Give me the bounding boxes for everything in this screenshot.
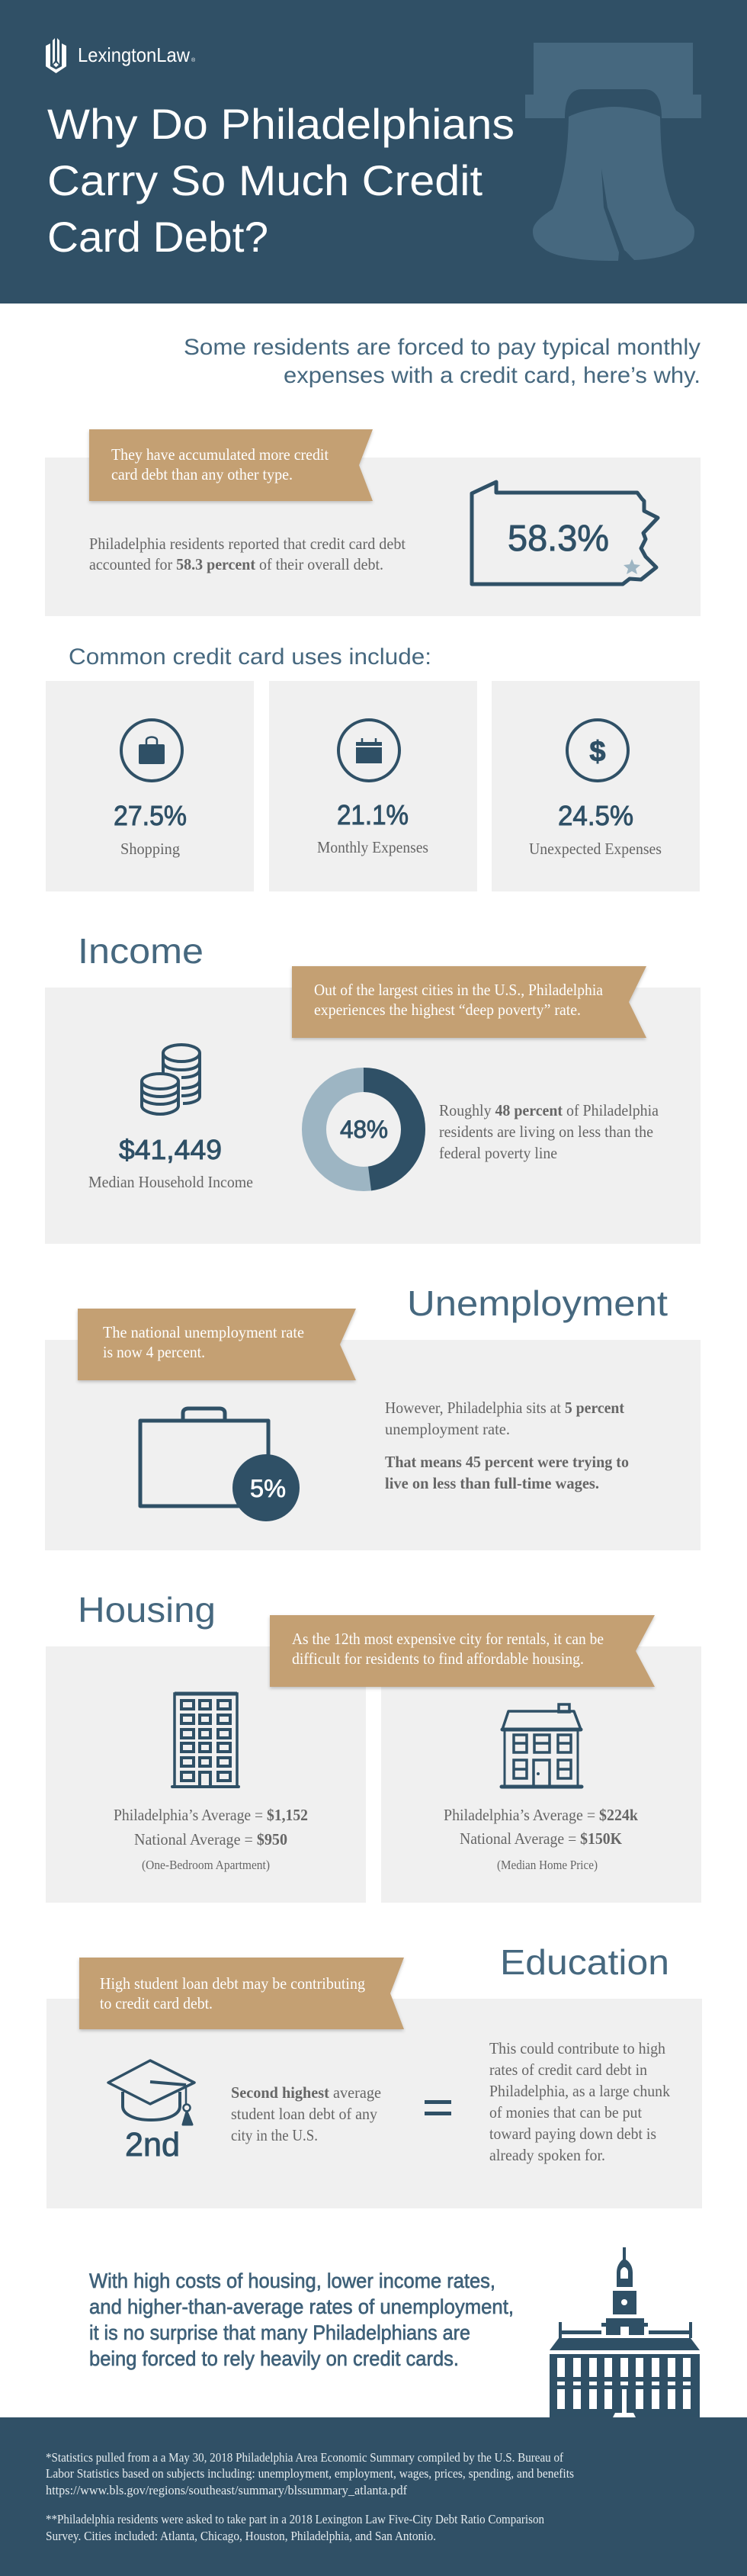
icon: graduation cap bbox=[108, 2060, 194, 2125]
title: Why Do Philadelphians bbox=[47, 100, 515, 148]
footnote: statistics source: Labor Statistics based on subjects including: unemployment, employment, wages, prices, spending, and benefits bbox=[46, 2466, 574, 2481]
ribbon callout: housing bbox=[270, 1615, 655, 1687]
title bbox=[47, 100, 515, 261]
icon: briefcase with 5%: 5% bbox=[250, 1475, 286, 1502]
stats: rent: (One-Bedroom Apartment) bbox=[142, 1858, 270, 1872]
body text: consequence: already spoken for. bbox=[489, 2146, 605, 2164]
ribbon callout: housing: difficult for residents to find affordable housing. bbox=[292, 1649, 584, 1668]
icon: coin stacks bbox=[142, 1045, 200, 1114]
card: unexpected expenses: 24.5% bbox=[558, 800, 633, 831]
stats: home price: National Average = $150K bbox=[460, 1829, 623, 1848]
body text: federal poverty line bbox=[439, 1144, 557, 1162]
ribbon callout: housing: As the 12th most expensive city for rentals, it can be bbox=[292, 1630, 604, 1648]
card: shopping: Shopping bbox=[120, 840, 180, 858]
body text: second highest: city in the U.S. bbox=[231, 2126, 318, 2144]
closing statement: being forced to rely heavily on credit cards. bbox=[89, 2347, 459, 2370]
icon: briefcase with 5% bbox=[140, 1408, 300, 1521]
body text: second highest: Second highest average bbox=[231, 2083, 381, 2102]
heading: housing: Housing bbox=[78, 1590, 216, 1630]
logo bbox=[46, 38, 196, 73]
footnote: survey: **Philadelphia residents were asked to take part in a 2018 Lexington Law Five-City Debt Ratio Comparison bbox=[46, 2512, 544, 2526]
body text: Roughly 48 percent of Philadelphia bbox=[439, 1101, 659, 1119]
body text: consequence: of monies that can be put bbox=[489, 2103, 642, 2122]
donut chart bbox=[314, 1080, 413, 1179]
closing statement bbox=[89, 2269, 514, 2370]
ribbon callout: They have accumulated more credit bbox=[111, 445, 329, 464]
body text: second highest: student loan debt of any bbox=[231, 2105, 377, 2123]
icon: dollar sign bbox=[567, 720, 628, 781]
closing statement: With high costs of housing, lower income rates, bbox=[89, 2269, 495, 2292]
panel: income: $41,449 bbox=[119, 1134, 222, 1165]
ribbon callout bbox=[292, 966, 646, 1038]
footnote: statistics source: https://www.bls.gov/regions/southeast/summary/blssummary_atlanta.pdf bbox=[46, 2483, 407, 2497]
body text: residents are living on less than the bbox=[439, 1123, 653, 1141]
heading: common uses: Common credit card uses include: bbox=[69, 644, 431, 670]
ribbon callout: card debt than any other type. bbox=[111, 465, 293, 483]
card: unexpected expenses bbox=[492, 681, 700, 891]
footer band bbox=[0, 2417, 747, 2576]
card: monthly expenses: Monthly Expenses bbox=[317, 838, 428, 856]
ribbon callout: experiences the highest “deep poverty” rate. bbox=[314, 1001, 581, 1019]
icon: Pennsylvania map: 58.3% bbox=[508, 519, 609, 559]
card: monthly expenses bbox=[269, 681, 477, 891]
card: shopping: 27.5% bbox=[114, 800, 187, 831]
panel: income: Median Household Income bbox=[88, 1173, 253, 1191]
icon: apartment building bbox=[172, 1694, 239, 1787]
ribbon callout bbox=[89, 429, 373, 501]
icon: house bbox=[502, 1704, 582, 1787]
title: Card Debt? bbox=[47, 213, 268, 261]
panel: unemployment bbox=[45, 1309, 701, 1550]
body text bbox=[89, 535, 406, 573]
footnote: survey bbox=[46, 2512, 544, 2543]
stats: rent: Philadelphia’s Average = $1,152 bbox=[114, 1806, 308, 1824]
icon: Independence Hall bbox=[550, 2247, 700, 2417]
panel: overall debt share bbox=[45, 429, 701, 616]
body text: consequence: Philadelphia, as a large chunk bbox=[489, 2082, 670, 2100]
ribbon callout: to credit card debt. bbox=[100, 1994, 213, 2012]
intro subheading: expenses with a credit card, here’s why. bbox=[284, 363, 701, 388]
closing statement: and higher-than-average rates of unemployment, bbox=[89, 2295, 514, 2318]
body text bbox=[439, 1101, 659, 1162]
stats: rent: National Average = $950 bbox=[134, 1830, 287, 1848]
stats: home price: Philadelphia’s Average = $224k bbox=[444, 1806, 638, 1824]
ribbon callout bbox=[79, 1958, 404, 2029]
panel: education: 2nd bbox=[125, 2126, 180, 2163]
panel: rent bbox=[46, 1646, 366, 1903]
title: Carry So Much Credit bbox=[47, 156, 483, 204]
icon: dollar sign: $ bbox=[589, 736, 606, 768]
ribbon callout: The national unemployment rate bbox=[103, 1323, 304, 1341]
intro subheading bbox=[184, 335, 701, 388]
body text: However, Philadelphia sits at 5 percent bbox=[385, 1399, 624, 1417]
icon: equals sign bbox=[425, 2100, 451, 2115]
intro subheading: Some residents are forced to pay typical monthly bbox=[184, 335, 701, 360]
card: shopping bbox=[46, 681, 254, 891]
ribbon callout: is now 4 percent. bbox=[103, 1343, 205, 1361]
ribbon callout: High student loan debt may be contributing bbox=[100, 1974, 365, 1993]
body text: unemployment rate. bbox=[385, 1420, 510, 1438]
panel: income bbox=[45, 966, 701, 1244]
body text: consequence: rates of credit card debt in bbox=[489, 2060, 647, 2079]
icon: Pennsylvania map bbox=[472, 482, 658, 584]
body text: That means 45 percent were trying to bbox=[385, 1453, 629, 1471]
body text: live on less than full-time wages. bbox=[385, 1474, 599, 1492]
stats: home price: (Median Home Price) bbox=[497, 1858, 598, 1872]
body text: consequence bbox=[489, 2039, 670, 2164]
footnote: survey: Survey. Cities included: Atlanta, Chicago, Houston, Philadelphia, and San Antonio. bbox=[46, 2529, 436, 2543]
body text bbox=[385, 1399, 629, 1492]
footnote: statistics source bbox=[46, 2450, 574, 2497]
icon: calendar bbox=[338, 720, 399, 781]
body text: consequence: toward paying down debt is bbox=[489, 2125, 656, 2143]
body text: Philadelphia residents reported that credit card debt bbox=[89, 535, 406, 553]
body text: second highest bbox=[231, 2083, 381, 2144]
logo: LexingtonLaw bbox=[78, 43, 190, 66]
card: monthly expenses: 21.1% bbox=[337, 799, 409, 830]
icon: Liberty Bell bbox=[525, 43, 701, 261]
heading: education: Education bbox=[500, 1942, 669, 1982]
heading: unemployment: Unemployment bbox=[407, 1283, 668, 1323]
card: unexpected expenses: Unexpected Expenses bbox=[529, 840, 662, 858]
closing statement: it is no surprise that many Philadelphians are bbox=[89, 2321, 470, 2344]
ribbon callout: Out of the largest cities in the U.S., Philadelphia bbox=[314, 981, 604, 999]
stats: home price bbox=[444, 1806, 638, 1872]
header banner bbox=[0, 0, 747, 304]
body text: accounted for 58.3 percent of their overall debt. bbox=[89, 555, 383, 573]
stats: rent bbox=[114, 1806, 308, 1872]
body text: consequence: This could contribute to high bbox=[489, 2039, 665, 2057]
donut chart: 48% bbox=[340, 1116, 388, 1143]
footnote: statistics source: *Statistics pulled from a a May 30, 2018 Philadelphia Area Economic Summary compiled by the U.S. Bureau of bbox=[46, 2450, 563, 2465]
panel: home price bbox=[381, 1646, 701, 1903]
ribbon callout bbox=[78, 1309, 356, 1380]
heading: income: Income bbox=[78, 931, 204, 971]
icon: shopping bag bbox=[121, 720, 182, 781]
panel: education bbox=[46, 1958, 702, 2208]
logo: ® bbox=[191, 57, 196, 63]
